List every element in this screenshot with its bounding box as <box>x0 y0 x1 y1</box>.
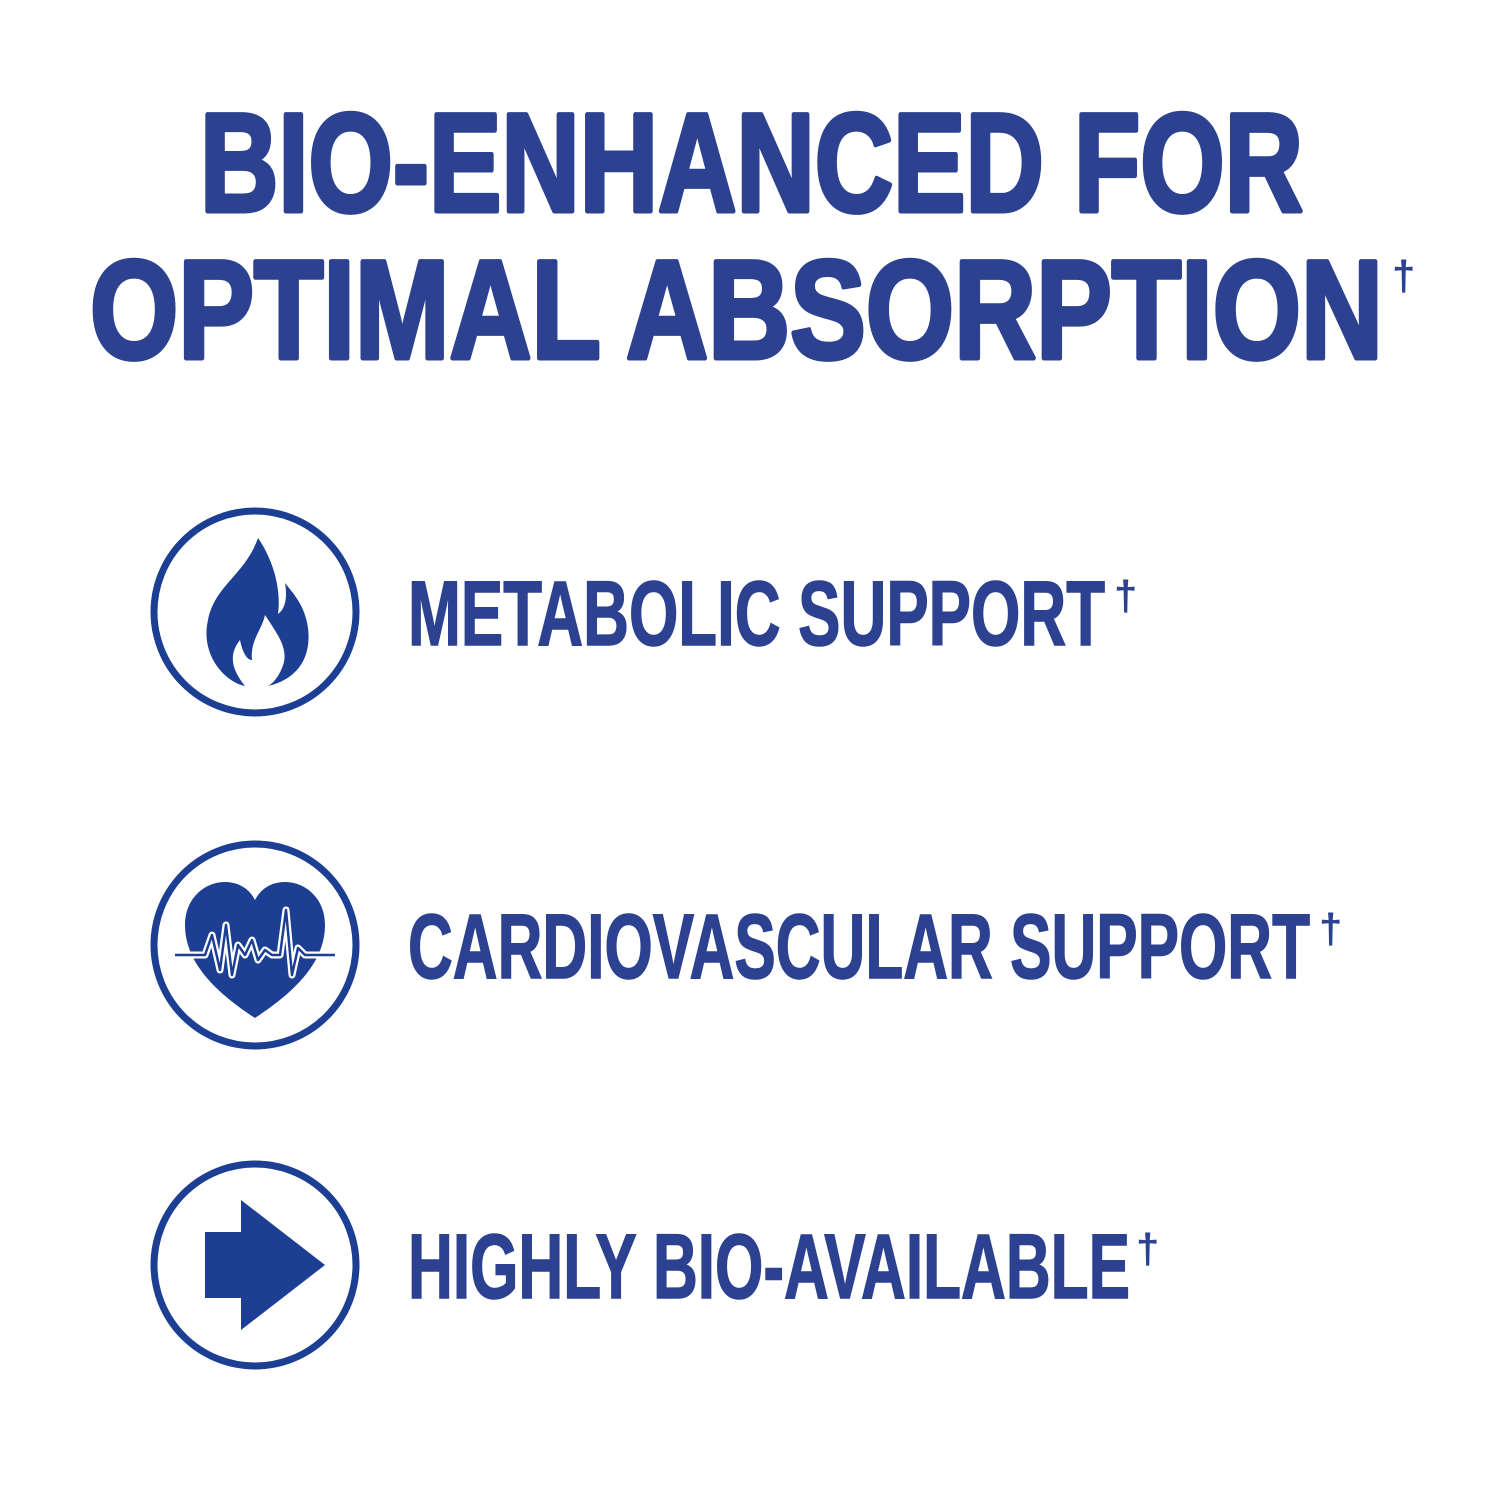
label: highly bio-available: HIGHLY BIO-AVAILABLE <box>408 1216 1130 1318</box>
item: cardiovascular support <box>154 844 1342 1046</box>
label: cardiovascular support: † <box>1319 905 1342 952</box>
item: metabolic support <box>154 511 1137 713</box>
label: highly bio-available: † <box>1136 1225 1159 1272</box>
item: highly bio-available <box>154 1164 1159 1366</box>
label: metabolic support: † <box>1114 572 1137 619</box>
icon: arrow <box>154 1164 356 1366</box>
title <box>90 84 1415 388</box>
label: metabolic support: METABOLIC SUPPORT <box>408 563 1105 665</box>
title: † <box>1392 252 1415 299</box>
icon: flame <box>154 511 356 713</box>
icon: heart with pulse <box>154 844 356 1046</box>
